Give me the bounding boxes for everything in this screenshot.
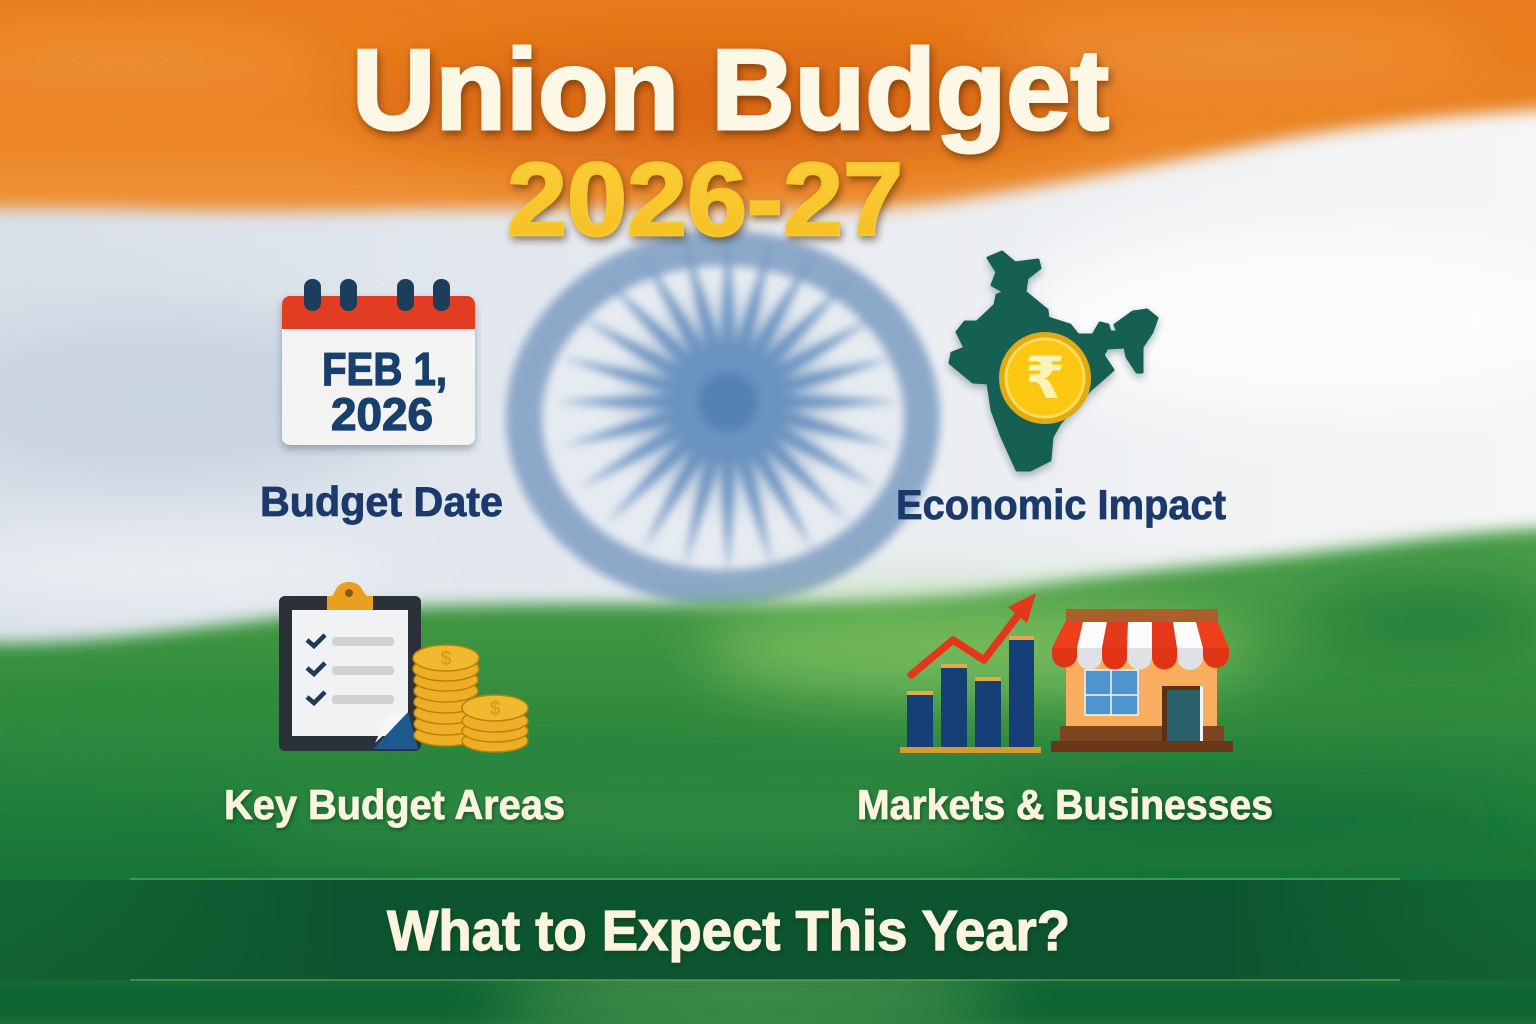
calendar date bbox=[322, 343, 447, 440]
bottom banner bbox=[0, 878, 1536, 981]
panel: economic impact bbox=[896, 252, 1226, 528]
icon: coin stacks bbox=[413, 645, 528, 752]
icon: india map with rupee coin bbox=[950, 252, 1157, 470]
rupee symbol: ₹ bbox=[1025, 344, 1065, 412]
awning scallops bbox=[1052, 648, 1229, 670]
label: budget date: Budget Date bbox=[260, 478, 503, 525]
label: economic impact: Economic Impact bbox=[896, 481, 1226, 528]
title line 2: 2026-27 bbox=[507, 142, 903, 258]
banner text: What to Expect This Year? bbox=[387, 899, 1070, 963]
panel: budget date bbox=[260, 279, 503, 525]
coin dollar marks bbox=[440, 648, 501, 720]
icon: storefront bbox=[1051, 609, 1233, 752]
calendar date: 2026 bbox=[331, 389, 433, 440]
green band bbox=[0, 526, 1536, 1024]
label: key budget areas: Key Budget Areas bbox=[224, 781, 565, 828]
coin dollar marks: $ bbox=[440, 648, 452, 670]
icon: calendar bbox=[282, 279, 475, 445]
panel: markets and businesses bbox=[857, 593, 1273, 828]
title line 1: Union Budget bbox=[352, 27, 1109, 154]
calendar date: FEB 1, bbox=[322, 343, 447, 395]
coin dollar marks: $ bbox=[489, 698, 501, 720]
label: markets and businesses: Markets & Businesses bbox=[857, 781, 1273, 828]
panel: key budget areas bbox=[224, 582, 565, 828]
orange band bbox=[0, 0, 1536, 211]
awning upper stripes bbox=[1052, 622, 1229, 648]
title bbox=[352, 27, 1109, 258]
ashoka chakra bbox=[523, 230, 923, 589]
icon: bar chart with arrow bbox=[900, 593, 1041, 753]
icon: clipboard bbox=[279, 582, 421, 751]
